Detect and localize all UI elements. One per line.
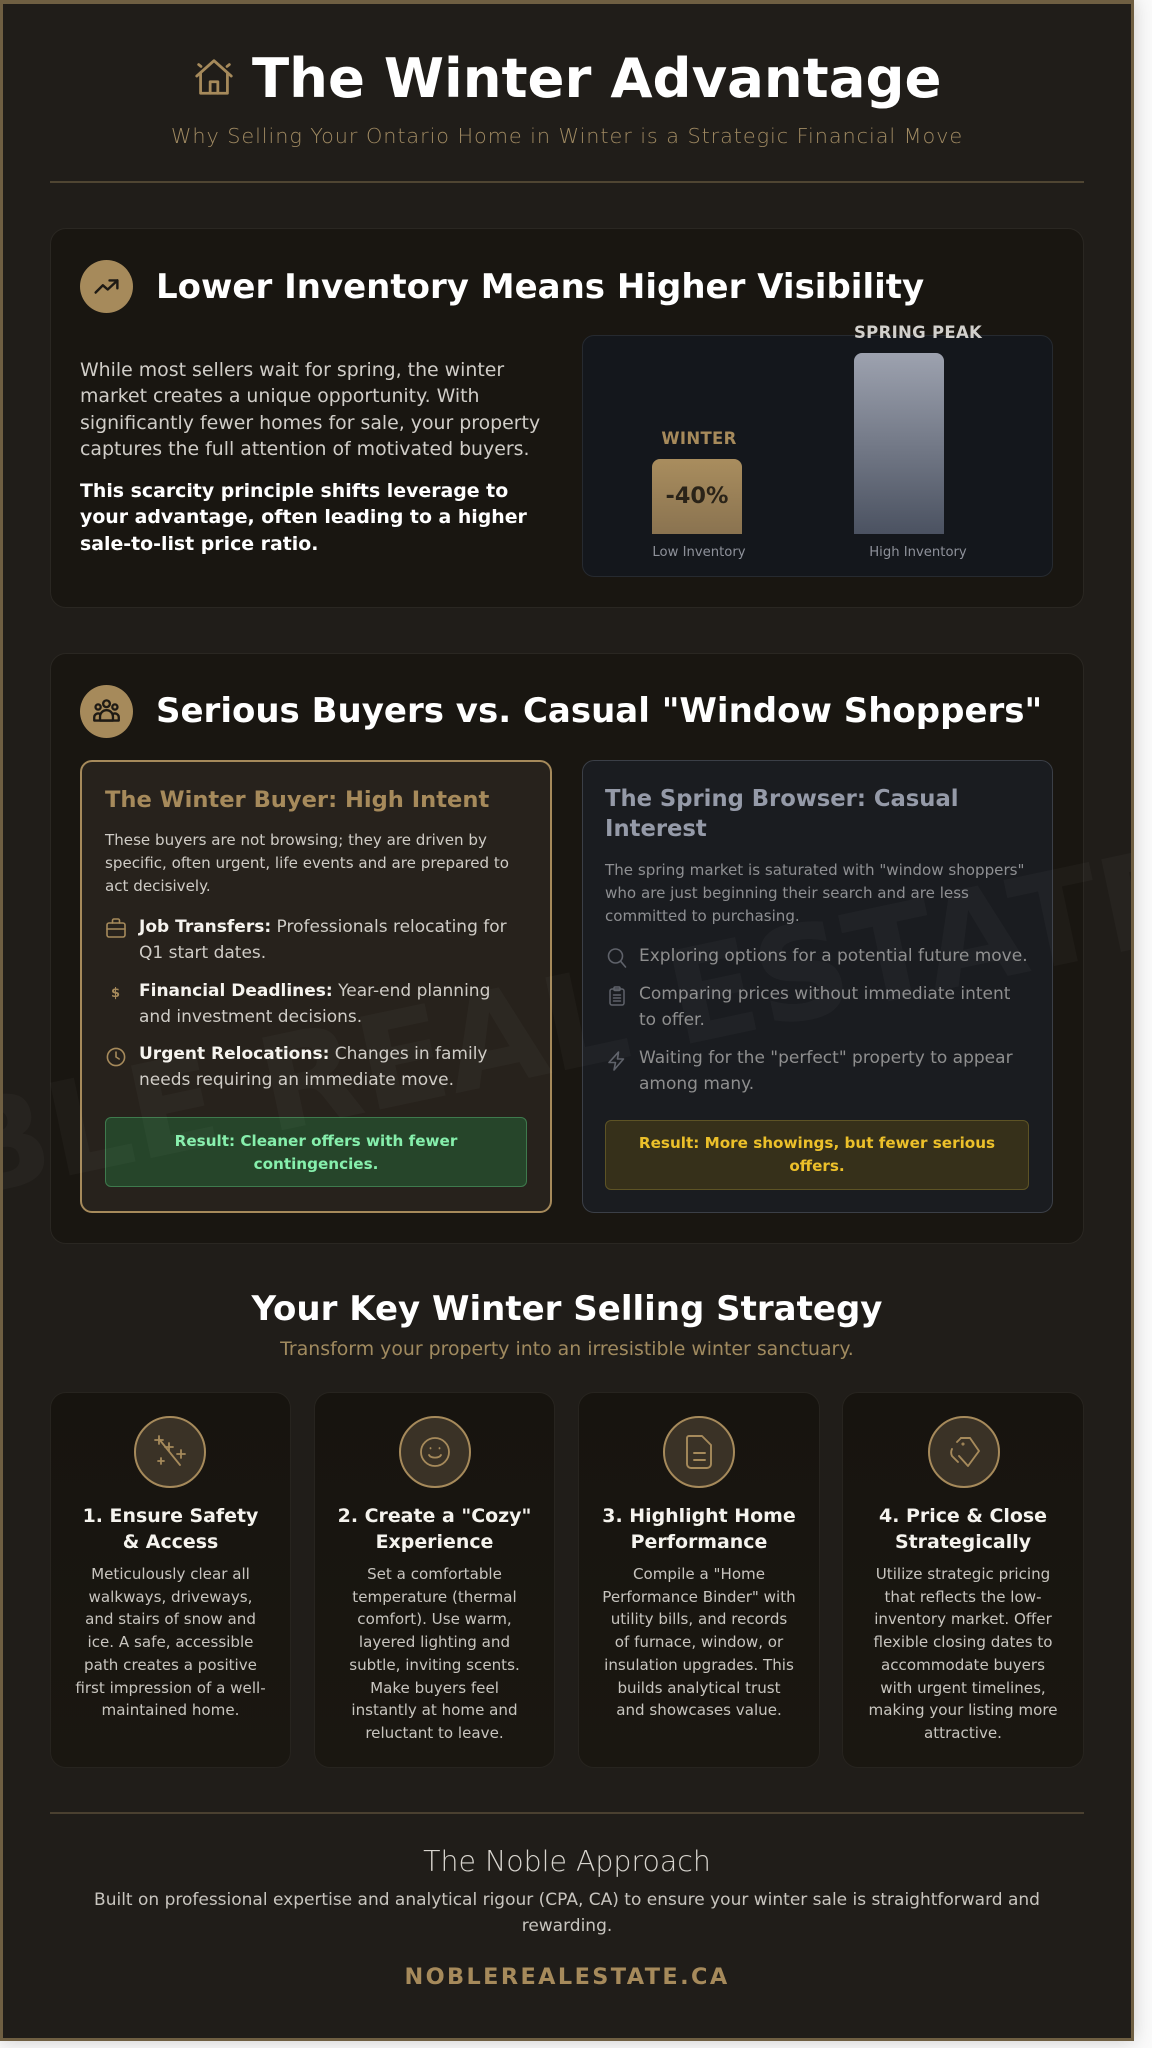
item: financial deadlines [139, 981, 490, 1027]
subtitle: Why Selling Your Ontario Home in Winter is a Strategic Financial Move [171, 124, 963, 148]
bar chart panel [582, 335, 1053, 577]
heading: lower inventory: Lower Inventory Means Higher Visibility [156, 267, 924, 307]
item: exploring options: Exploring options for a potential future move. [639, 946, 1028, 966]
winter buyer intro: act decisively. [105, 877, 211, 895]
result: more showings [605, 1120, 1029, 1190]
body: cozy: comfort). Use warm, [357, 1610, 512, 1628]
result: more showings: offers. [789, 1157, 845, 1175]
spring browser intro: The spring market is saturated with "window shoppers" [605, 861, 1024, 879]
result: cleaner offers: Result: Cleaner offers with fewer [175, 1132, 457, 1150]
body: safety: ice. A safe, accessible [88, 1633, 253, 1651]
item: comparing prices: Comparing prices without immediate intent [639, 984, 1010, 1004]
spring browser title: Interest [605, 816, 707, 842]
result: more showings: Result: More showings, but fewer serious [639, 1134, 995, 1152]
header icon: house [195, 59, 233, 95]
subheading: strategy: Transform your property into an irresistible winter sanctuary. [280, 1338, 854, 1360]
item: urgent relocations [139, 1044, 488, 1090]
body: cozy: Set a comfortable [367, 1565, 502, 1583]
winter buyer title: The Winter Buyer: High Intent [105, 787, 489, 813]
winter buyer intro: These buyers are not browsing; they are driven by [105, 831, 487, 849]
body: cozy [349, 1565, 520, 1742]
text block: scarcity principle [80, 480, 527, 555]
text block: winter market: While most sellers wait for spring, the winter [80, 359, 504, 381]
body: performance: utility bills, and records [611, 1610, 787, 1628]
winter bar [652, 459, 742, 534]
icon: clock [106, 1048, 126, 1066]
body: safety: path creates a positive [84, 1656, 257, 1674]
winter value: -40% [666, 483, 728, 509]
panel: spring browser [582, 760, 1053, 1213]
title: price: 4. Price & Close [879, 1505, 1047, 1527]
spring browser intro: committed to purchasing. [605, 907, 800, 925]
body: price [868, 1565, 1057, 1742]
text block: scarcity principle: your advantage, often leading to a higher [80, 506, 527, 528]
text block: scarcity principle: sale-to-list price ratio. [80, 533, 318, 555]
title: The Winter Advantage [252, 46, 941, 110]
icon: users [80, 685, 133, 738]
winter buyer intro: specific, often urgent, life events and are prepared to [105, 854, 509, 872]
body: price: attractive. [924, 1724, 1002, 1742]
bar chart [652, 323, 982, 560]
item: financial deadlines: and investment decisions. [139, 1007, 362, 1027]
card: cozy [314, 1392, 555, 1768]
spring browser title [605, 786, 959, 842]
body: safety: maintained home. [102, 1701, 239, 1719]
icon: smile [399, 1416, 471, 1488]
body: safety: walkways, driveways, [89, 1588, 252, 1606]
body: safety: first impression of a well- [75, 1679, 266, 1697]
title: cozy: 2. Create a "Cozy" [338, 1505, 531, 1527]
body: performance: of furnace, window, or [615, 1633, 783, 1651]
item: waiting: Waiting for the "perfect" property to appear [639, 1048, 1013, 1068]
icon: dollar: $ [111, 986, 120, 1001]
item: urgent relocations: Urgent Relocations: Changes in family [139, 1044, 488, 1064]
panel: lower inventory [50, 228, 1084, 608]
text block: winter market: captures the full attention of motivated buyers. [80, 438, 529, 460]
icon: briefcase [106, 918, 126, 938]
body: price: inventory market. Offer [874, 1610, 1052, 1628]
body: performance: insulation upgrades. This [604, 1656, 794, 1674]
winter buyer intro [104, 831, 509, 895]
low inventory label: Low Inventory [652, 545, 746, 560]
card: performance [578, 1392, 820, 1768]
footer text [94, 1890, 1040, 1936]
text block: winter market: significantly fewer homes for sale, your property [80, 412, 540, 434]
body: cozy: reluctant to leave. [365, 1724, 504, 1742]
item: job transfers: Job Transfers: Professionals relocating for [139, 917, 507, 937]
title: cozy: Experience [376, 1531, 493, 1553]
result: cleaner offers: contingencies. [254, 1155, 378, 1173]
title: safety: 1. Ensure Safety [83, 1505, 258, 1527]
body: performance: and showcases value. [616, 1701, 782, 1719]
footer text: Built on professional expertise and analytical rigour (CPA, CA) to ensure your winter sale is straightforward and [94, 1890, 1040, 1910]
body: cozy: subtle, inviting scents. [349, 1656, 520, 1674]
item: comparing prices: to offer. [639, 1010, 705, 1030]
panel: winter buyer [80, 760, 552, 1213]
spring browser intro [604, 861, 1024, 925]
icon: trending up [80, 260, 133, 313]
body: cozy: layered lighting and [359, 1633, 510, 1651]
result: cleaner offers [105, 1117, 527, 1187]
card: safety [50, 1392, 291, 1768]
high inventory label: High Inventory [869, 545, 967, 560]
footer brand: NOBLEREALESTATE.CA [404, 1964, 730, 1990]
item: financial deadlines: Financial Deadlines: Year-end planning [139, 981, 490, 1001]
item: urgent relocations: needs requiring an immediate move. [139, 1070, 454, 1090]
icon: document [663, 1416, 735, 1488]
title: safety: & Access [123, 1531, 218, 1553]
title: price: Strategically [895, 1531, 1031, 1553]
title: price [879, 1505, 1047, 1553]
spring browser intro: who are just beginning their search and are less [605, 884, 969, 902]
spring label: SPRING PEAK [854, 323, 982, 342]
card: price [842, 1392, 1084, 1768]
body: price: making your listing more [868, 1701, 1057, 1719]
body: cozy: temperature (thermal [352, 1588, 517, 1606]
body: price: Utilize strategic pricing [876, 1565, 1050, 1583]
spring bar [854, 353, 944, 534]
icon: clipboard [609, 986, 625, 1006]
body: cozy: Make buyers feel [370, 1679, 499, 1697]
title: performance: Performance [631, 1531, 767, 1553]
text block: scarcity principle: This scarcity principle shifts leverage to [80, 480, 508, 502]
item: job transfers [138, 917, 507, 963]
body: cozy: instantly at home and [351, 1701, 518, 1719]
icon: bolt [608, 1051, 624, 1071]
spring browser title: The Spring Browser: Casual [605, 786, 959, 812]
body: safety [75, 1565, 266, 1719]
item: comparing prices [639, 984, 1010, 1030]
heading: strategy: Your Key Winter Selling Strategy [252, 1289, 882, 1329]
body: safety: Meticulously clear all [91, 1565, 250, 1583]
title: performance [602, 1505, 796, 1553]
panel: serious buyers [50, 653, 1084, 1244]
text block: winter market [80, 359, 540, 460]
body: price: flexible closing dates to [873, 1633, 1053, 1651]
body: performance: builds analytical trust [617, 1679, 781, 1697]
title: cozy [338, 1505, 531, 1553]
title: performance: 3. Highlight Home [602, 1505, 796, 1527]
winter label: WINTER [661, 429, 737, 448]
title: safety [83, 1505, 258, 1553]
item: waiting: among many. [639, 1074, 754, 1094]
body: performance: Performance Binder" with [602, 1588, 796, 1606]
text block: winter market: market creates a unique opportunity. With [80, 385, 479, 407]
body: price: that reflects the low- [884, 1588, 1042, 1606]
body: safety: and stairs of snow and [85, 1610, 256, 1628]
body: performance [602, 1565, 796, 1719]
body: price: accommodate buyers [881, 1656, 1045, 1674]
body: price: with urgent timelines, [880, 1679, 1046, 1697]
body: performance: Compile a "Home [633, 1565, 765, 1583]
icon: search [608, 948, 626, 968]
icon: wand sparkles [134, 1416, 206, 1488]
item: waiting [639, 1048, 1013, 1094]
heading: serious buyers: Serious Buyers vs. Casual "Window Shoppers" [156, 691, 1042, 731]
footer heading: The Noble Approach [423, 1845, 711, 1878]
icon: tags [928, 1416, 1000, 1488]
footer text: rewarding. [522, 1916, 612, 1936]
item: job transfers: Q1 start dates. [139, 943, 266, 963]
